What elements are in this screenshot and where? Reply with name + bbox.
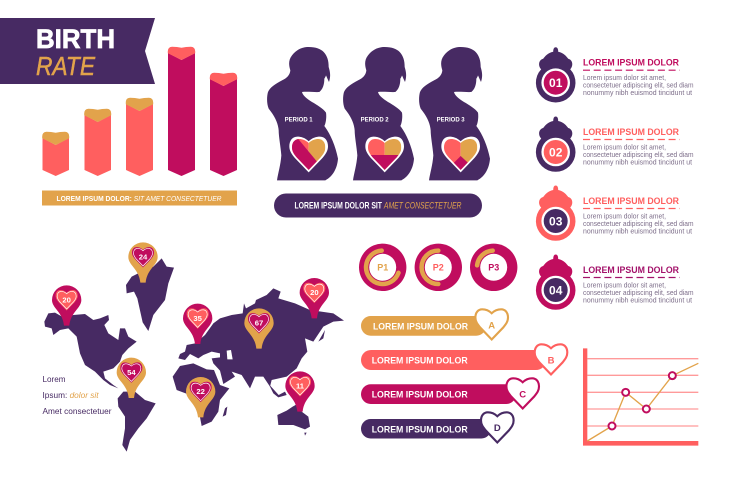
period 2 silhouette <box>343 47 414 180</box>
pin 20 east asia <box>300 278 329 318</box>
heart B: B <box>548 356 555 367</box>
option bar C: LOREM IPSUM DOLOR <box>372 390 468 400</box>
map: greenland <box>126 258 174 331</box>
item body: nonummy nibh euismod tincidunt ut <box>583 296 692 304</box>
item body: consectetuer adipiscing elit, sed diam <box>583 219 694 228</box>
item heading: LOREM IPSUM DOLOR <box>583 58 679 69</box>
item body <box>583 280 694 304</box>
period 1 silhouette <box>267 47 338 180</box>
item body: nonummy nibh euismod tincidunt ut <box>583 88 692 97</box>
line chart <box>583 348 698 446</box>
heart A <box>475 309 508 339</box>
icon: bottle 03 <box>536 186 576 241</box>
donut P1: P1 <box>377 263 388 273</box>
pin 54 central america <box>117 358 146 398</box>
bar 2 <box>84 109 111 176</box>
icon: bottle 01: 01 <box>549 76 563 90</box>
pin 35 europe: 35 <box>193 314 203 323</box>
icon: bottle 02 <box>536 116 576 172</box>
icon: bottle 01 <box>536 47 576 102</box>
item body: Lorem ipsum dolor sit amet, <box>583 142 666 152</box>
option bar A <box>361 309 508 339</box>
heart C: C <box>519 389 526 400</box>
pin 24 greenland: 24 <box>139 252 148 261</box>
item body <box>583 212 694 236</box>
icon: bottle 03: 03 <box>549 214 563 228</box>
heart B <box>535 344 567 374</box>
period 1 silhouette: PERIOD 1 <box>285 116 313 123</box>
item body: consectetuer adipiscing elit, sed diam <box>583 81 694 90</box>
map pins <box>52 242 329 417</box>
map legend: Lorem <box>42 375 66 384</box>
option bar B: LOREM IPSUM DOLOR <box>372 356 468 366</box>
heart D: D <box>494 423 501 434</box>
pin 54 central america: 54 <box>127 368 136 377</box>
heart C <box>506 378 539 408</box>
title banner <box>0 18 155 84</box>
pin 22 africa <box>186 377 215 417</box>
donut P2: P2 <box>433 263 444 273</box>
period caption pill <box>274 194 482 218</box>
item heading: LOREM IPSUM DOLOR <box>583 265 679 276</box>
period 3 heart <box>441 137 480 172</box>
list item 02 <box>536 116 694 172</box>
map legend <box>42 375 112 416</box>
pin 11 australia <box>285 371 315 412</box>
bar 4 <box>168 47 195 176</box>
list item 03 <box>536 186 694 241</box>
option bar B <box>361 344 567 374</box>
item body: consectetuer adipiscing elit, sed diam <box>583 150 694 159</box>
title: birth: BIRTH <box>36 24 115 54</box>
data points <box>608 372 676 429</box>
bar 1 <box>42 132 69 176</box>
pin 24 greenland <box>128 242 158 283</box>
option bar D: LOREM IPSUM DOLOR <box>372 424 468 434</box>
panel: pregnancy periods <box>267 47 490 180</box>
pin 67 russia <box>244 308 274 349</box>
item body <box>583 142 694 166</box>
period 2 heart <box>365 137 404 172</box>
item body: nonummy nibh euismod tincidunt ut <box>583 158 692 166</box>
donut P2 <box>415 244 462 291</box>
period 2 silhouette: PERIOD 2 <box>361 116 389 123</box>
chart caption strip: LOREM IPSUM DOLOR: SIT AMET CONSECTETUER <box>56 194 222 203</box>
icon: bottle 04 <box>536 254 576 310</box>
map: americas <box>44 313 156 452</box>
option bar C <box>361 378 539 408</box>
icon: bottle 04: 04 <box>549 283 563 297</box>
map legend: Amet consectetuer <box>42 407 112 416</box>
period 3 silhouette <box>419 47 490 180</box>
trend line <box>587 363 698 441</box>
bar chart: heart bars <box>42 47 237 176</box>
chart axes <box>583 348 698 446</box>
item body: consectetuer adipiscing elit, sed diam <box>583 288 694 297</box>
icon: bottle 02: 02 <box>549 145 563 159</box>
item body: Lorem ipsum dolor sit amet, <box>583 280 666 290</box>
map legend: Ipsum: dolor sit <box>42 391 99 400</box>
donut P1 <box>359 244 406 291</box>
item body: nonummy nibh euismod tincidunt ut <box>583 226 692 236</box>
map: eurasia, africa, australia <box>173 288 344 436</box>
item body: Lorem ipsum dolor sit amet, <box>583 212 666 220</box>
item body: Lorem ipsum dolor sit amet, <box>583 73 666 82</box>
period 3 silhouette: PERIOD 3 <box>437 116 465 123</box>
pin 35 europe <box>183 304 212 344</box>
pin 20 north america: 20 <box>62 295 71 304</box>
item heading: LOREM IPSUM DOLOR <box>583 196 679 207</box>
list item 04 <box>536 254 694 310</box>
option bar A: LOREM IPSUM DOLOR <box>373 321 468 331</box>
pin 22 africa: 22 <box>196 387 205 396</box>
pin 20 north america <box>52 285 81 326</box>
period 1 heart <box>289 137 328 174</box>
pin 20 east asia: 20 <box>310 288 319 297</box>
item body <box>583 73 694 97</box>
title: rate: RATE <box>36 51 96 81</box>
donut P3: P3 <box>488 263 499 273</box>
donut P3 <box>470 244 517 291</box>
chart caption strip <box>42 190 237 206</box>
list item 01 <box>536 47 694 102</box>
item heading: LOREM IPSUM DOLOR <box>583 127 679 138</box>
bar 3 <box>126 98 153 176</box>
pin 11 australia: 11 <box>296 381 305 390</box>
heart D <box>481 412 514 442</box>
option bar D <box>361 412 514 442</box>
period caption pill: LOREM IPSUM DOLOR SIT AMET CONSECTETUER <box>294 201 462 211</box>
heart A: A <box>488 321 495 332</box>
world map <box>44 258 344 452</box>
pin 67 russia: 67 <box>255 318 263 327</box>
bar 5 <box>210 73 237 176</box>
